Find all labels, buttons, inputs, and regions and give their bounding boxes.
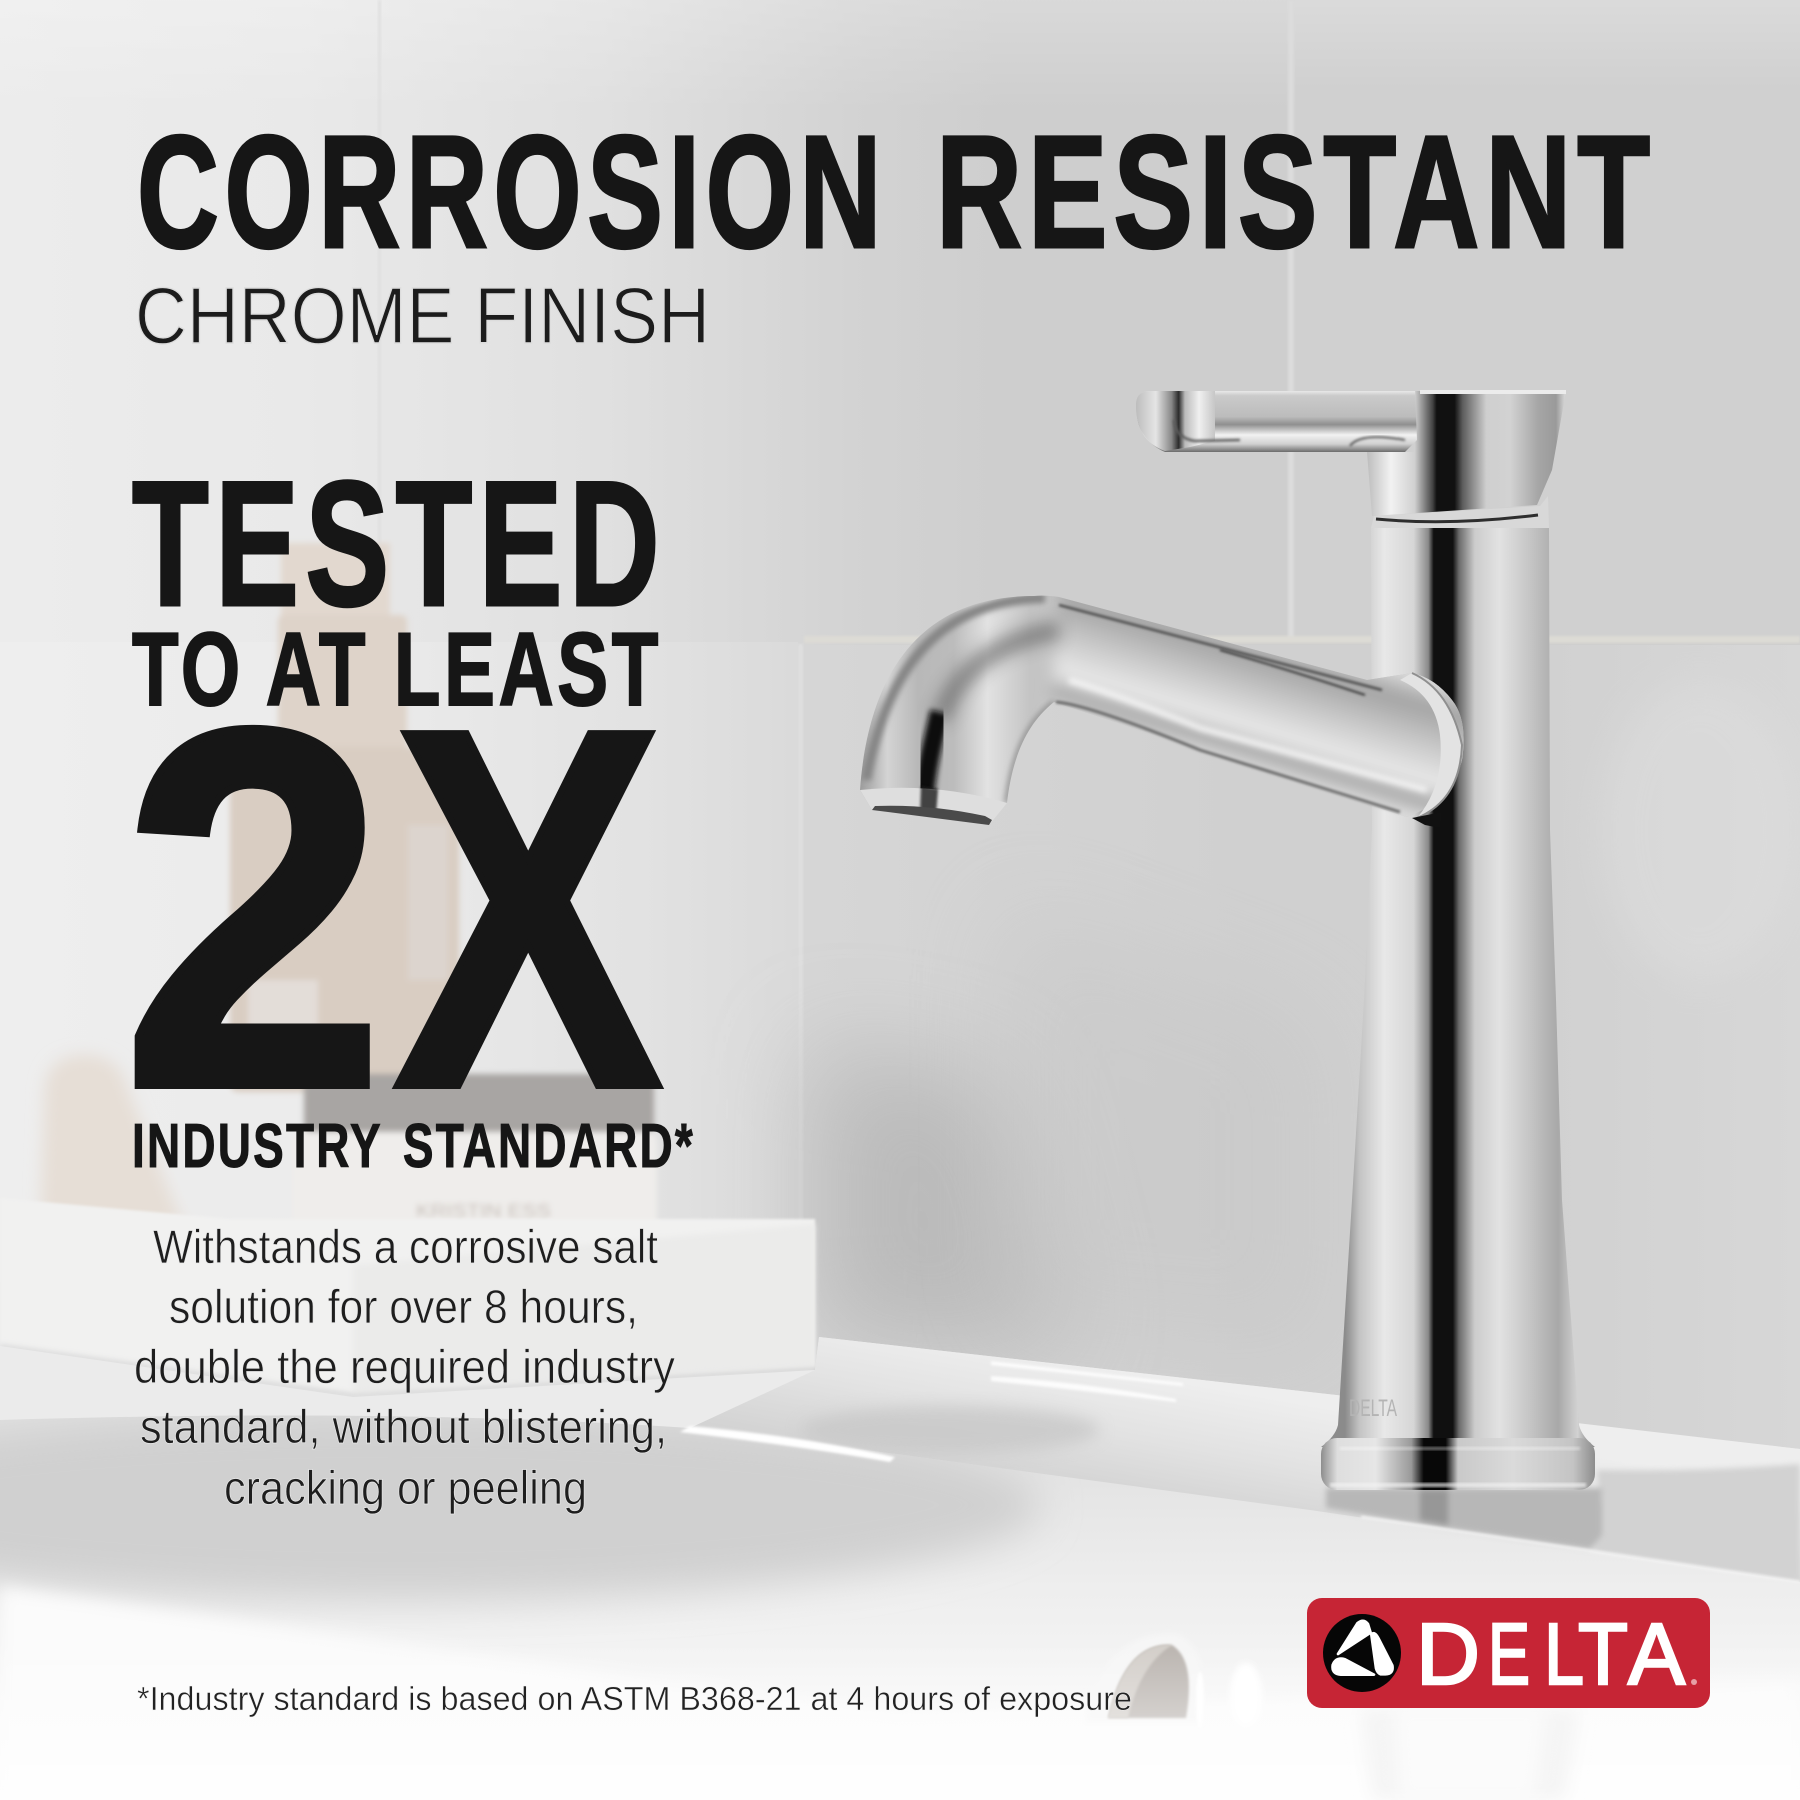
description text: standard, without blistering, <box>140 1400 667 1453</box>
logo wordmark: D <box>1416 1606 1480 1703</box>
description text <box>134 1220 675 1514</box>
description text: double the required industry <box>134 1340 675 1393</box>
faucet collar ring <box>1371 496 1549 528</box>
description text: solution for over 8 hours, <box>169 1280 638 1333</box>
claim subheading: to at least: TO AT LEAST <box>132 612 662 728</box>
subtitle: CHROME FINISH <box>135 271 710 360</box>
faucet <box>850 390 1595 1490</box>
faucet lever handle <box>1136 391 1417 452</box>
footnote: *Industry standard is based on ASTM B368-21 at 4 hours of exposure <box>137 1680 1132 1717</box>
faucet aerator <box>860 786 1007 825</box>
logo wordmark: T <box>1578 1606 1628 1703</box>
logo wordmark: E <box>1488 1606 1530 1703</box>
claim heading: tested: TESTED <box>132 444 666 643</box>
faucet engraved brand name: DELTA <box>1349 1395 1397 1422</box>
sink basin <box>0 1337 1800 1800</box>
big number: 2: 2 <box>122 624 385 1194</box>
background objects: blurred bottle <box>230 543 459 1092</box>
sink drain hole <box>1085 1634 1262 1728</box>
big letter: X: X <box>394 624 664 1194</box>
background objects: white tray <box>0 1198 815 1402</box>
claim block: tested to at least 2X <box>122 444 695 1194</box>
background objects: small blurred bottle <box>40 1055 185 1230</box>
logo wordmark <box>1416 1606 1685 1703</box>
faucet spout <box>860 596 1464 826</box>
logo: Delta badge <box>1307 1598 1710 1708</box>
faucet reflection on sink <box>1326 1488 1800 1582</box>
background objects: blurred jar <box>292 1074 657 1237</box>
faucet column and tapered body <box>1321 528 1595 1447</box>
title <box>137 102 1656 281</box>
logo wordmark: A <box>1628 1606 1685 1703</box>
logo wordmark: L <box>1544 1606 1584 1703</box>
faucet base ring <box>1321 1438 1595 1490</box>
logo icon: triangle mark <box>1323 1614 1401 1692</box>
description text: cracking or peeling <box>224 1461 587 1514</box>
background objects: blurred jar: KRISTIN ESS <box>416 1201 551 1221</box>
faucet handle hub <box>1367 391 1566 516</box>
logo registered mark <box>1691 1679 1697 1685</box>
description text: Withstands a corrosive salt <box>153 1220 658 1273</box>
title word: corrosion: CORROSION <box>137 102 887 281</box>
claim label: industry standard: INDUSTRY STANDARD* <box>132 1112 695 1181</box>
